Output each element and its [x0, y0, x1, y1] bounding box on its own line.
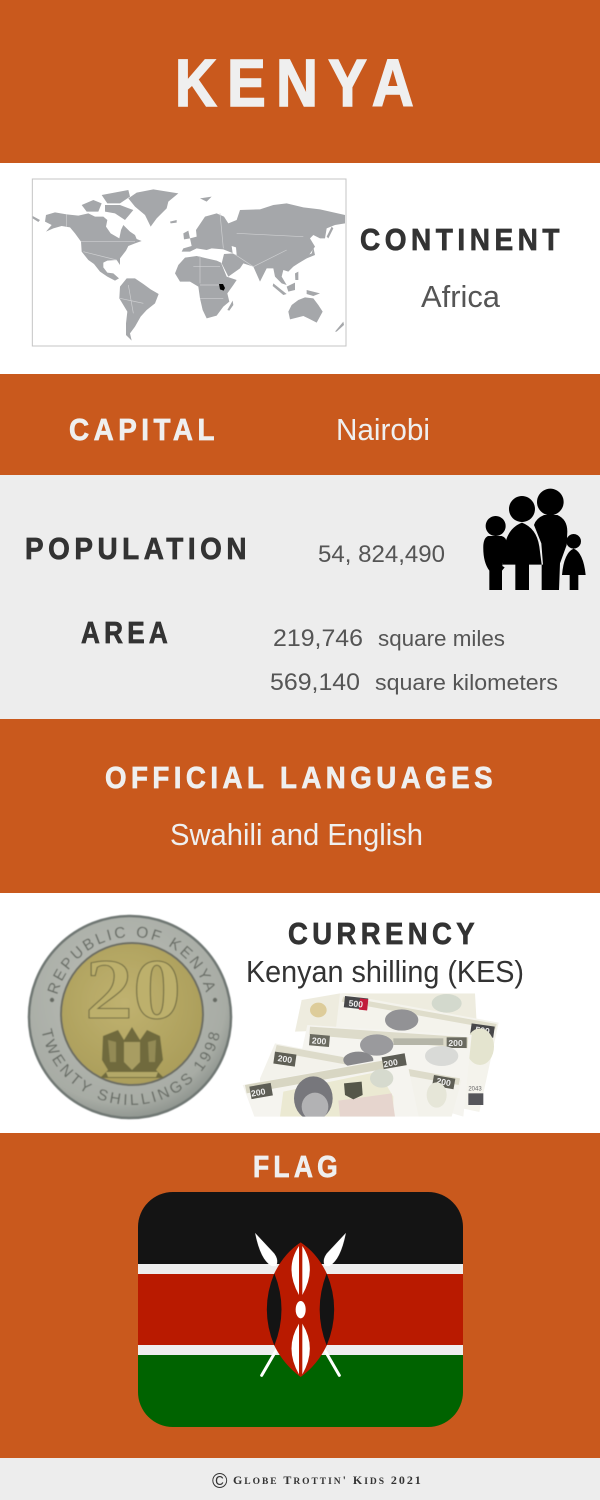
note: 200 middle: [298, 1025, 472, 1117]
note: 500: 500: [348, 998, 364, 1010]
note: back left: [295, 993, 477, 1032]
icon: boy: [483, 516, 507, 590]
text: credit: GLOBE TROTTIN' KIDS 2021: [233, 1473, 423, 1487]
band: population and area background: [0, 475, 600, 719]
title: KENYA: [175, 46, 424, 121]
band: footer background: [0, 1458, 600, 1500]
band: continent background: [0, 163, 600, 374]
text: languages: Swahili and English: [170, 817, 423, 852]
note: 500: 500: [475, 1024, 491, 1036]
band: title background: [0, 0, 600, 163]
icon: girl: [562, 534, 586, 590]
icon: woman: [503, 496, 542, 590]
note: 200 front: 200: [383, 1057, 399, 1069]
heading: official languages: OFFICIAL LANGUAGES: [105, 760, 497, 795]
text: square miles value: 219,746: [273, 625, 363, 652]
text: population value: 54, 824,490: [318, 541, 445, 568]
note: 200 behind front: [260, 1043, 462, 1117]
text: square kilometers unit: square kilometers: [375, 670, 558, 695]
note: 500: [330, 993, 499, 1112]
note: 200 middle: 200: [448, 1038, 463, 1048]
heading: currency: CURRENCY: [288, 916, 479, 951]
footer credit: [212, 1470, 423, 1493]
flag: shield: [267, 1242, 334, 1377]
heading: population: POPULATION: [25, 531, 251, 566]
note: 500: 2043: [468, 1087, 482, 1093]
coin dot left: [50, 998, 54, 1002]
coin: [27, 914, 233, 1120]
icon: man: [534, 489, 567, 590]
banknotes: [243, 993, 499, 1121]
band: languages background: [0, 719, 600, 893]
coin text: bottom: TWENTY SHILLINGS 1998: [42, 1028, 220, 1106]
coin numeral: 20: [85, 941, 181, 1037]
flag of Kenya: [138, 1192, 463, 1427]
world map: [32, 179, 346, 346]
band: capital background: [0, 374, 600, 475]
icon: family: [483, 489, 586, 590]
coin emblem: [100, 1027, 164, 1078]
coin text: top: REPUBLIC OF KENYA: [47, 926, 215, 994]
heading: area: AREA: [81, 615, 172, 650]
note: 200 middle: 200: [311, 1035, 327, 1047]
text: currency name: Kenyan shilling (KES): [246, 954, 524, 989]
band: currency background: [0, 893, 600, 1133]
text: Africa: Africa: [421, 279, 501, 314]
text: square miles unit: square miles: [378, 626, 505, 651]
text: square kilometers value: 569,140: [270, 669, 360, 696]
band: flag background: [0, 1133, 600, 1458]
flag: spears: [255, 1233, 346, 1375]
text: Nairobi: Nairobi: [336, 412, 430, 447]
coin dot right: [213, 998, 217, 1002]
heading: continent: CONTINENT: [360, 222, 564, 257]
note: 200 front: [243, 1053, 419, 1121]
note: 200 front: 200: [250, 1086, 266, 1099]
heading: capital: CAPITAL: [69, 412, 219, 447]
icon: copyright: ©: [212, 1470, 228, 1493]
note: 200 behind front: 200: [436, 1076, 452, 1088]
note: 200 behind front: 200: [277, 1053, 293, 1065]
heading: flag: FLAG: [253, 1149, 342, 1184]
